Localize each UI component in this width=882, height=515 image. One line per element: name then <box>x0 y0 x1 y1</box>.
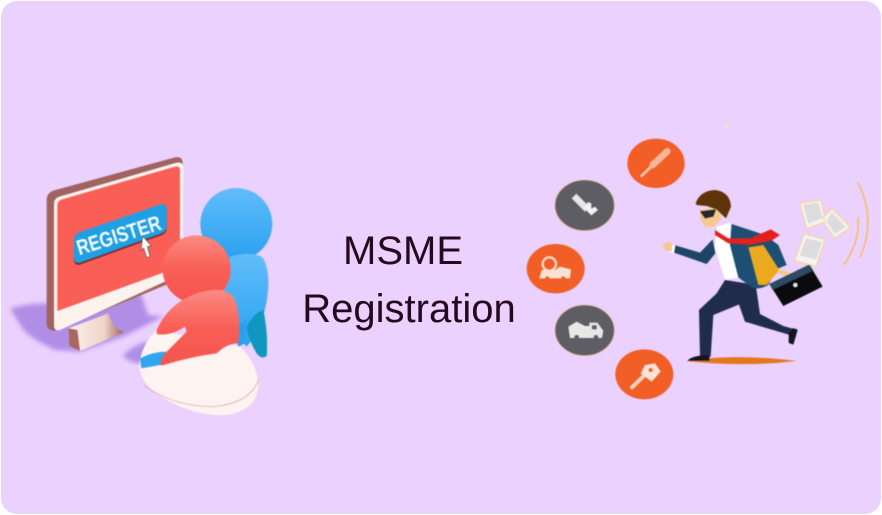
title: MSME Registration <box>302 229 516 331</box>
monitor <box>47 157 183 331</box>
monitor shadow <box>10 292 163 352</box>
blue person <box>200 188 272 357</box>
small spark <box>724 124 728 128</box>
ground shadow <box>686 357 797 364</box>
yellow lining <box>748 245 779 285</box>
title: MSME Registration: Registration <box>302 287 516 331</box>
register button: REGISTER <box>74 212 164 261</box>
monitor stand <box>68 313 124 351</box>
red tie <box>715 229 780 245</box>
flying documents <box>795 200 851 267</box>
front leg <box>699 280 757 357</box>
title: MSME Registration: MSME <box>343 229 463 273</box>
front arm <box>674 239 715 264</box>
shirt <box>715 223 738 280</box>
head <box>696 190 731 227</box>
cursor <box>141 236 151 257</box>
icon: truck <box>555 305 614 355</box>
icon: wrench <box>555 180 614 230</box>
jacket <box>730 224 787 288</box>
white mouse body <box>139 330 258 415</box>
motion lines <box>844 183 868 265</box>
icon circles <box>527 139 685 399</box>
briefcase <box>769 265 823 306</box>
icon: tow vehicle <box>527 244 585 293</box>
red person <box>157 235 239 366</box>
running businessman <box>663 183 868 364</box>
icon: key <box>615 349 673 399</box>
illustration: register at computer <box>10 157 272 415</box>
back leg <box>737 287 797 344</box>
desk shadow <box>123 342 157 363</box>
icon: screwdriver <box>627 139 685 188</box>
